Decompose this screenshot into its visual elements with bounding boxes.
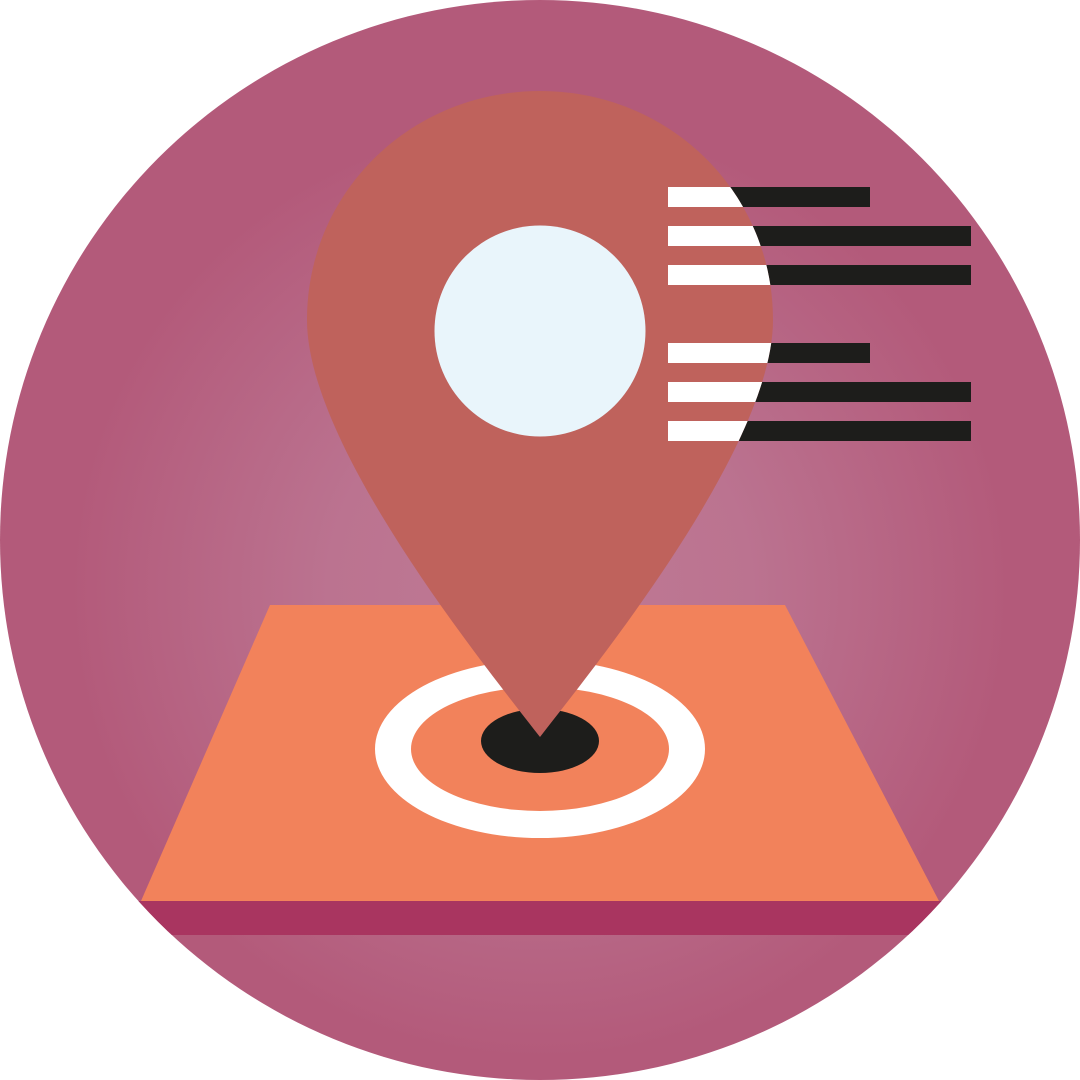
location pin (307, 91, 773, 737)
white text lines inside pin (668, 187, 772, 441)
pin hole (434, 226, 646, 436)
target ring (375, 660, 705, 838)
map: orange plane with target rings (100, 605, 980, 935)
black text lines (668, 187, 971, 441)
map plane (141, 605, 939, 901)
target centre (481, 709, 599, 773)
map front edge (100, 901, 980, 935)
